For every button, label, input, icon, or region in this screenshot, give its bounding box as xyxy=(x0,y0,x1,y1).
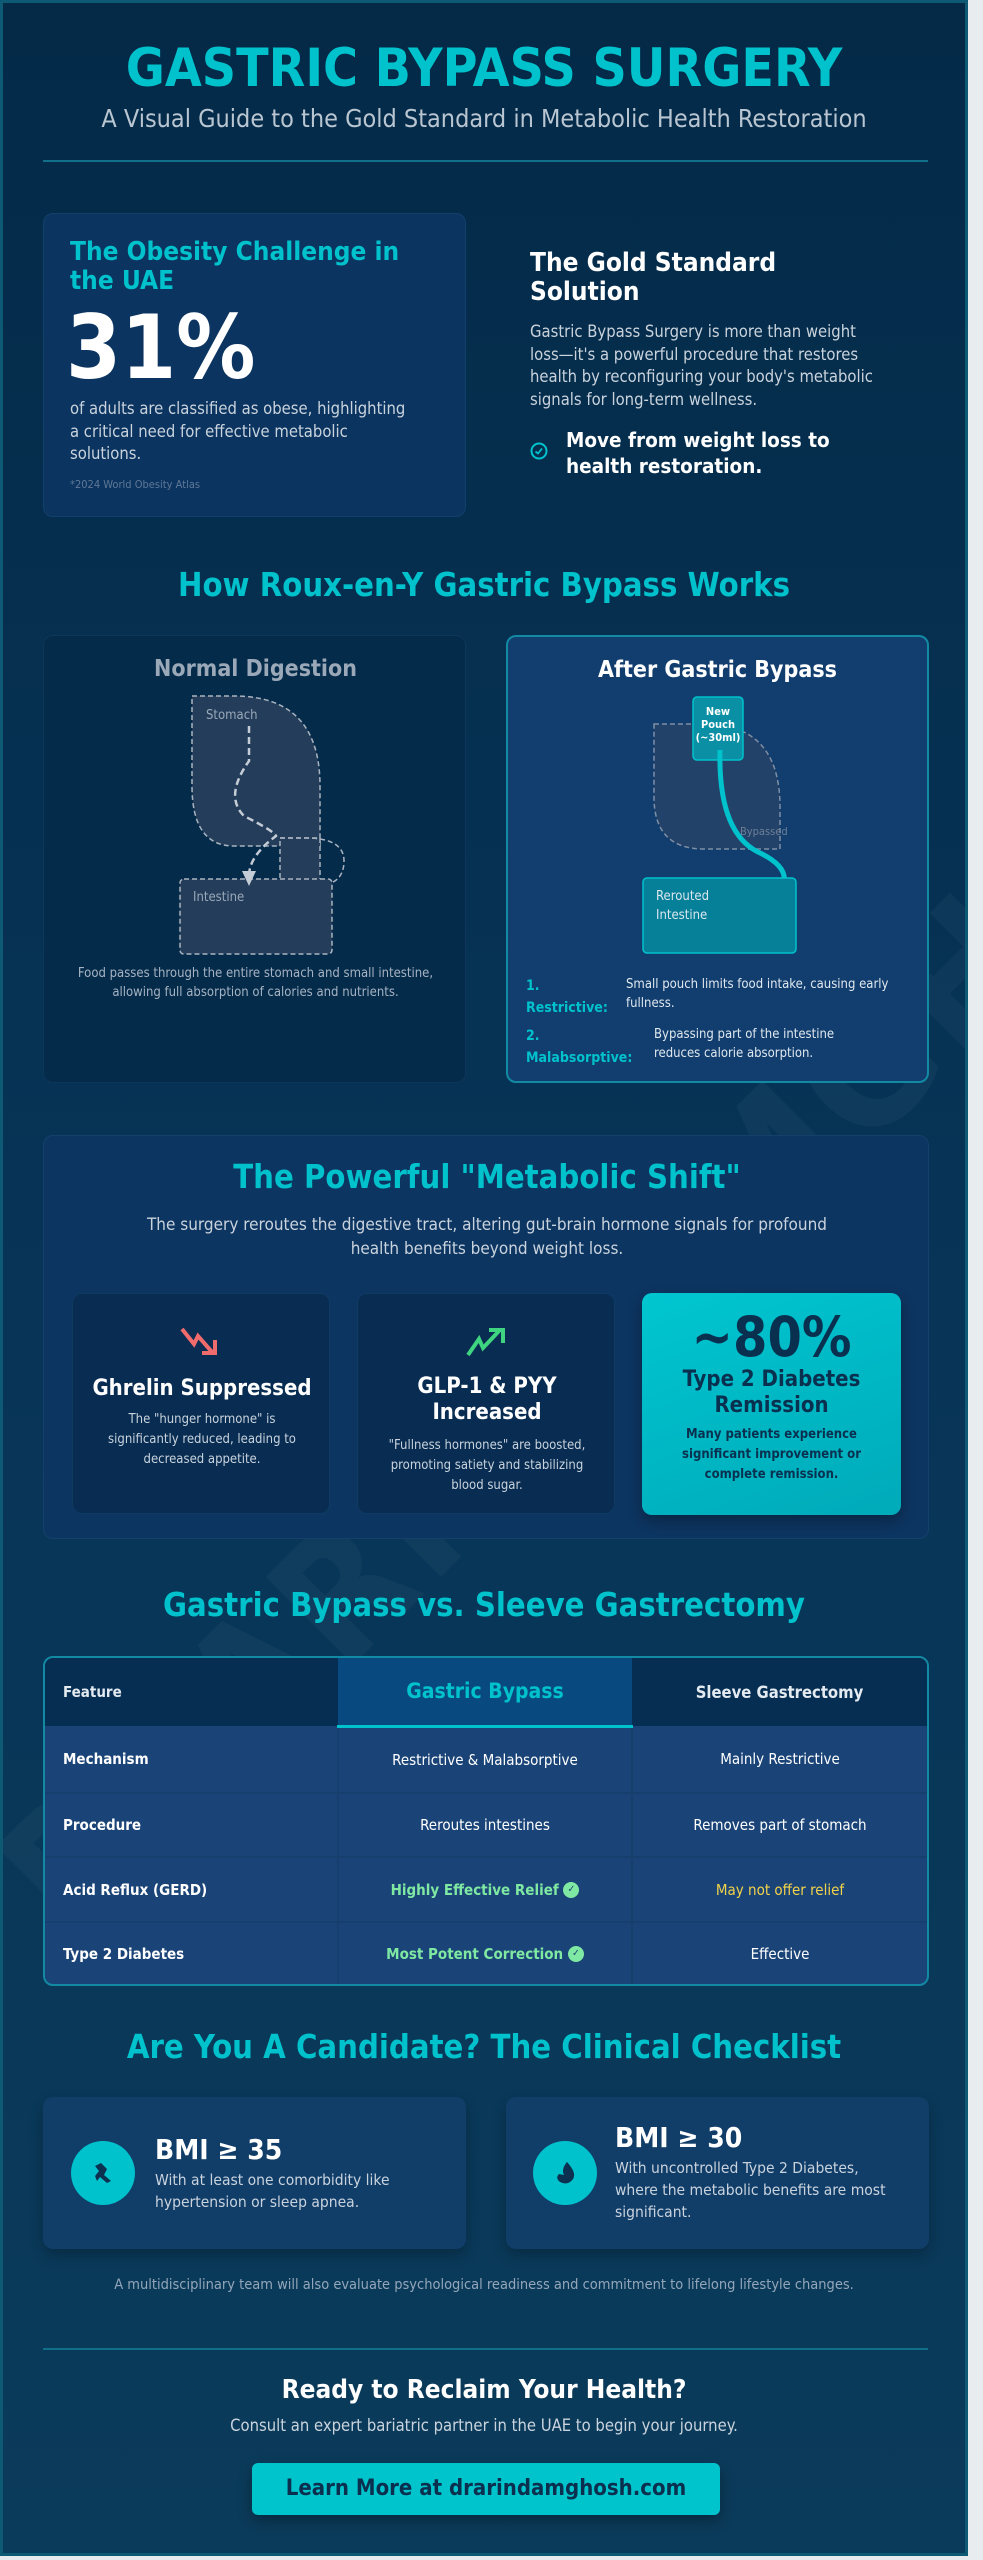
CTA heading: Ready to Reclaim Your Health? xyxy=(282,2375,686,2405)
section heading: how it works: How Roux-en-Y Gastric Bypass Works xyxy=(178,566,790,604)
card: diabetes remission: Remission xyxy=(714,1393,829,1418)
panel: after gastric bypass: After Gastric Bypass xyxy=(598,657,837,683)
comparison table: Feature xyxy=(63,1683,122,1701)
comparison table: Most Potent Correction xyxy=(386,1945,563,1963)
card: ghrelin: The "hunger hormone" is significantly reduced, leading to decreased appetite. xyxy=(108,1412,296,1467)
comparison table: May not offer relief xyxy=(716,1881,844,1899)
comparison table xyxy=(43,1656,929,1986)
panel: metabolic shift: The Powerful "Metabolic Shift" xyxy=(233,1158,741,1196)
card: BMI 35 xyxy=(43,2097,466,2249)
icon: up trend xyxy=(466,1328,505,1356)
panel: normal digestion: Normal Digestion xyxy=(154,656,357,682)
card: GLP-1: Increased xyxy=(432,1400,542,1425)
text block: gold standard xyxy=(530,248,873,478)
icon: down trend xyxy=(180,1328,217,1355)
panel: normal digestion xyxy=(43,635,466,1083)
comparison table: ✓ xyxy=(572,1948,580,1959)
CTA button: Learn More at drarindamghosh.com xyxy=(286,2476,686,2501)
comparison table: Effective xyxy=(751,1945,809,1963)
panel: after gastric bypass xyxy=(506,635,929,1083)
card: BMI 35: With at least one comorbidity like hypertension or sleep apnea. xyxy=(155,2171,390,2211)
comparison table: Procedure xyxy=(63,1816,141,1834)
comparison table: Mechanism xyxy=(63,1750,149,1768)
point: malabsorptive xyxy=(526,1027,834,1066)
card: GLP-1: "Fullness hormones" are boosted, promoting satiety and stabilizing blood sugar. xyxy=(389,1438,585,1493)
icon: lungs xyxy=(71,2141,135,2205)
card: BMI 30: BMI ≥ 30 xyxy=(615,2121,742,2154)
point: malabsorptive: Bypassing part of the intestine reduces calorie absorption. xyxy=(654,1027,834,1061)
comparison table: Type 2 Diabetes xyxy=(63,1945,184,1963)
card: BMI 30 xyxy=(506,2097,929,2249)
diagram: normal digestion: Stomach xyxy=(206,708,258,723)
diagram: bypass: (~30ml) xyxy=(696,731,740,744)
comparison table: ✓ xyxy=(568,1884,575,1895)
point: malabsorptive: 2. xyxy=(526,1028,540,1044)
section heading: candidate: Are You A Candidate? The Clinical Checklist xyxy=(127,2028,841,2066)
card: diabetes remission: ~80% xyxy=(692,1305,851,1369)
source note: *2024 World Obesity Atlas xyxy=(70,478,200,491)
diagram: normal digestion xyxy=(179,695,345,955)
comparison table: Restrictive & Malabsorptive xyxy=(392,1750,578,1768)
point: restrictive xyxy=(526,977,888,1016)
diagram: normal digestion: Intestine xyxy=(193,890,244,905)
diagram: bypass: Intestine xyxy=(656,908,707,923)
card: BMI 30: With uncontrolled Type 2 Diabetes, where the metabolic benefits are most significant. xyxy=(615,2159,886,2221)
diagram: bypass: New xyxy=(706,705,730,718)
section heading: comparison: Gastric Bypass vs. Sleeve Gastrectomy xyxy=(163,1586,805,1624)
panel: obesity challenge xyxy=(43,213,466,517)
note: multidisciplinary: A multidisciplinary team will also evaluate psychological readiness and commitment to lifelong lifestyle changes. xyxy=(114,2277,854,2293)
comparison table: Gastric Bypass xyxy=(406,1679,564,1703)
point: restrictive: 1. xyxy=(526,978,540,994)
comparison table: Acid Reflux (GERD) xyxy=(63,1881,207,1899)
diagram: bypass: Pouch xyxy=(701,718,735,731)
comparison table: Reroutes intestines xyxy=(420,1816,550,1834)
check point: Move from weight loss to health restoration. xyxy=(566,428,830,478)
card: GLP-1 xyxy=(357,1293,615,1514)
caption: normal: Food passes through the entire stomach and small intestine, allowing full absorption of calories and nutrients. xyxy=(78,966,433,1000)
stat: 31%: 31% xyxy=(66,296,256,399)
point: restrictive: Restrictive: xyxy=(526,1000,608,1016)
card: ghrelin xyxy=(72,1293,330,1514)
card: GLP-1: GLP-1 & PYY xyxy=(417,1374,557,1399)
card: BMI 35: BMI ≥ 35 xyxy=(155,2133,282,2166)
CTA button xyxy=(252,2463,720,2515)
CTA text: Consult an expert bariatric partner in the UAE to begin your journey. xyxy=(230,2416,738,2435)
text: metabolic intro: The surgery reroutes the digestive tract, altering gut-brain hormone signals for profound health benefits beyond weight loss. xyxy=(147,1215,827,1259)
text block: gold standard: Gastric Bypass Surgery is more than weight loss—it's a powerful procedure that restores health by reconfiguring your body's metabolic signals for long-term wellness. xyxy=(530,322,873,408)
comparison table: Highly Effective Relief xyxy=(391,1881,559,1899)
point: malabsorptive: Malabsorptive: xyxy=(526,1050,632,1066)
point: restrictive: Small pouch limits food intake, causing early fullness. xyxy=(626,977,888,1011)
heading: obesity: The Obesity Challenge in the UAE xyxy=(70,237,399,296)
diagram: bypass: Bypassed xyxy=(740,825,788,838)
text: obesity description: of adults are classified as obese, highlighting a critical need for effective metabolic solutions. xyxy=(70,399,405,463)
diagram: bypass: Rerouted xyxy=(656,889,709,904)
comparison table: Sleeve Gastrectomy xyxy=(696,1682,863,1702)
subtitle: A Visual Guide to the Gold Standard in Metabolic Health Restoration xyxy=(101,104,867,133)
text block: gold standard: The Gold Standard Solution xyxy=(530,248,776,307)
comparison table: Removes part of stomach xyxy=(693,1816,867,1834)
card: diabetes remission xyxy=(642,1293,901,1515)
card: diabetes remission: Type 2 Diabetes xyxy=(683,1367,860,1392)
diagram: bypass xyxy=(642,696,797,954)
card: ghrelin: Ghrelin Suppressed xyxy=(92,1376,312,1401)
comparison table: Mainly Restrictive xyxy=(720,1750,840,1768)
icon: drop xyxy=(533,2141,597,2205)
panel: metabolic shift xyxy=(43,1135,929,1539)
card: diabetes remission: Many patients experience significant improvement or complete remission. xyxy=(682,1427,861,1482)
title: GASTRIC BYPASS SURGERY xyxy=(126,38,842,99)
